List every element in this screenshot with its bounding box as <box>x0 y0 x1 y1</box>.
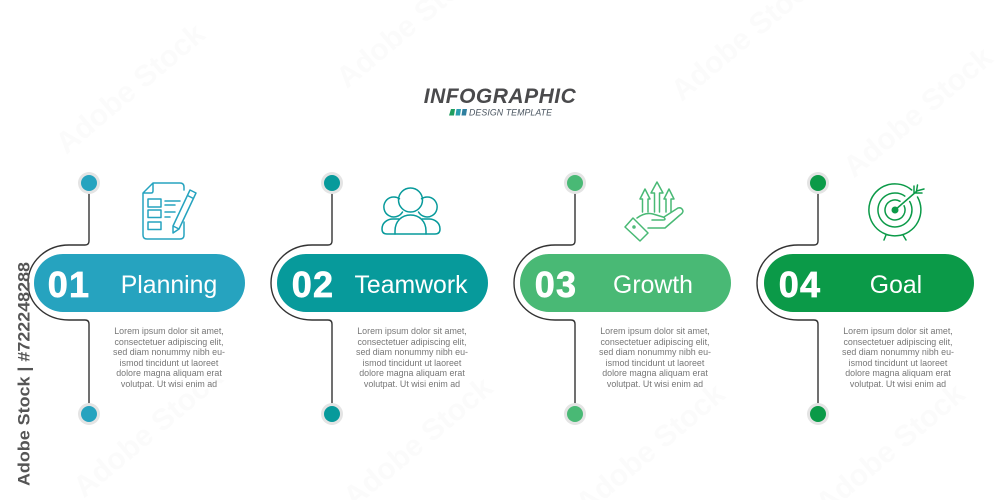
body text 4: dolore magna aliquam erat <box>845 368 951 378</box>
pill 3 <box>520 254 731 312</box>
pill 1: 01 <box>48 264 90 305</box>
body text 1: ismod tincidunt ut laoreet <box>120 358 219 368</box>
body text 1: volutpat. Ut wisi enim ad <box>121 379 217 389</box>
top dot 4 <box>807 172 829 194</box>
body text 4: volutpat. Ut wisi enim ad <box>850 379 946 389</box>
step 1: planning <box>28 172 245 425</box>
top dot 3 <box>564 172 586 194</box>
bottom dot 3 <box>564 403 586 425</box>
body text 3: sed diam nonummy nibh eu- <box>599 347 711 357</box>
pill 4: Goal <box>870 272 922 299</box>
bottom dot 1 <box>78 403 100 425</box>
pill 1 <box>34 254 245 312</box>
body text 2: sed diam nonummy nibh eu- <box>356 347 468 357</box>
body text 2: volutpat. Ut wisi enim ad <box>364 379 460 389</box>
pill 4: 04 <box>779 264 821 305</box>
body text 3: consectetuer adipiscing elit, <box>600 337 710 347</box>
pill 1: Planning <box>121 272 217 299</box>
body text 4: Lorem ipsum dolor sit amet, <box>843 326 953 336</box>
bottom dot 4 <box>807 403 829 425</box>
body text 3: volutpat. Ut wisi enim ad <box>607 379 703 389</box>
body text 1: consectetuer adipiscing elit, <box>114 337 224 347</box>
pill 3: Growth <box>613 272 693 299</box>
connector line 2 <box>271 193 332 404</box>
body text 2 <box>356 326 468 389</box>
pill 3: 03 <box>535 264 577 305</box>
body text 4 <box>842 326 954 389</box>
body text 2: Lorem ipsum dolor sit amet, <box>357 326 467 336</box>
step 3: growth <box>514 172 731 425</box>
icon: document with pencil <box>143 183 196 239</box>
body text 4: sed diam nonummy nibh eu- <box>842 347 954 357</box>
pill 2: 02 <box>292 264 334 305</box>
body text 2: dolore magna aliquam erat <box>359 368 465 378</box>
connector line 3 <box>514 193 575 404</box>
icon: hand with growth arrows <box>625 182 683 241</box>
pill 2 <box>277 254 488 312</box>
icon: team of people <box>382 188 440 234</box>
body text 3: dolore magna aliquam erat <box>602 368 708 378</box>
step 4: goal <box>757 172 974 425</box>
body text 2: consectetuer adipiscing elit, <box>357 337 467 347</box>
body text 4: consectetuer adipiscing elit, <box>843 337 953 347</box>
body text 3: Lorem ipsum dolor sit amet, <box>600 326 710 336</box>
bottom dot 2 <box>321 403 343 425</box>
body text 1 <box>113 326 225 389</box>
body text 2: ismod tincidunt ut laoreet <box>363 358 462 368</box>
connector line 1 <box>28 193 89 404</box>
body text 3 <box>599 326 711 389</box>
text: Adobe Stock <box>50 17 212 160</box>
body text 1: dolore magna aliquam erat <box>116 368 222 378</box>
pill 4 <box>764 254 974 312</box>
icon: target with arrow <box>869 184 924 240</box>
watermark: stock id: Adobe Stock | #722248288 <box>16 262 34 486</box>
pill 2: Teamwork <box>354 272 468 299</box>
title: INFOGRAPHIC <box>424 85 577 108</box>
text: Adobe Stock <box>837 41 999 184</box>
top dot 2 <box>321 172 343 194</box>
text: Adobe Stock <box>67 361 229 500</box>
body text 4: ismod tincidunt ut laoreet <box>849 358 948 368</box>
step 2: teamwork <box>271 172 488 425</box>
connector line 4 <box>757 193 818 404</box>
body text 3: ismod tincidunt ut laoreet <box>606 358 705 368</box>
body text 1: sed diam nonummy nibh eu- <box>113 347 225 357</box>
subtitle: DESIGN TEMPLATE <box>469 108 552 118</box>
top dot 1 <box>78 172 100 194</box>
body text 1: Lorem ipsum dolor sit amet, <box>114 326 224 336</box>
